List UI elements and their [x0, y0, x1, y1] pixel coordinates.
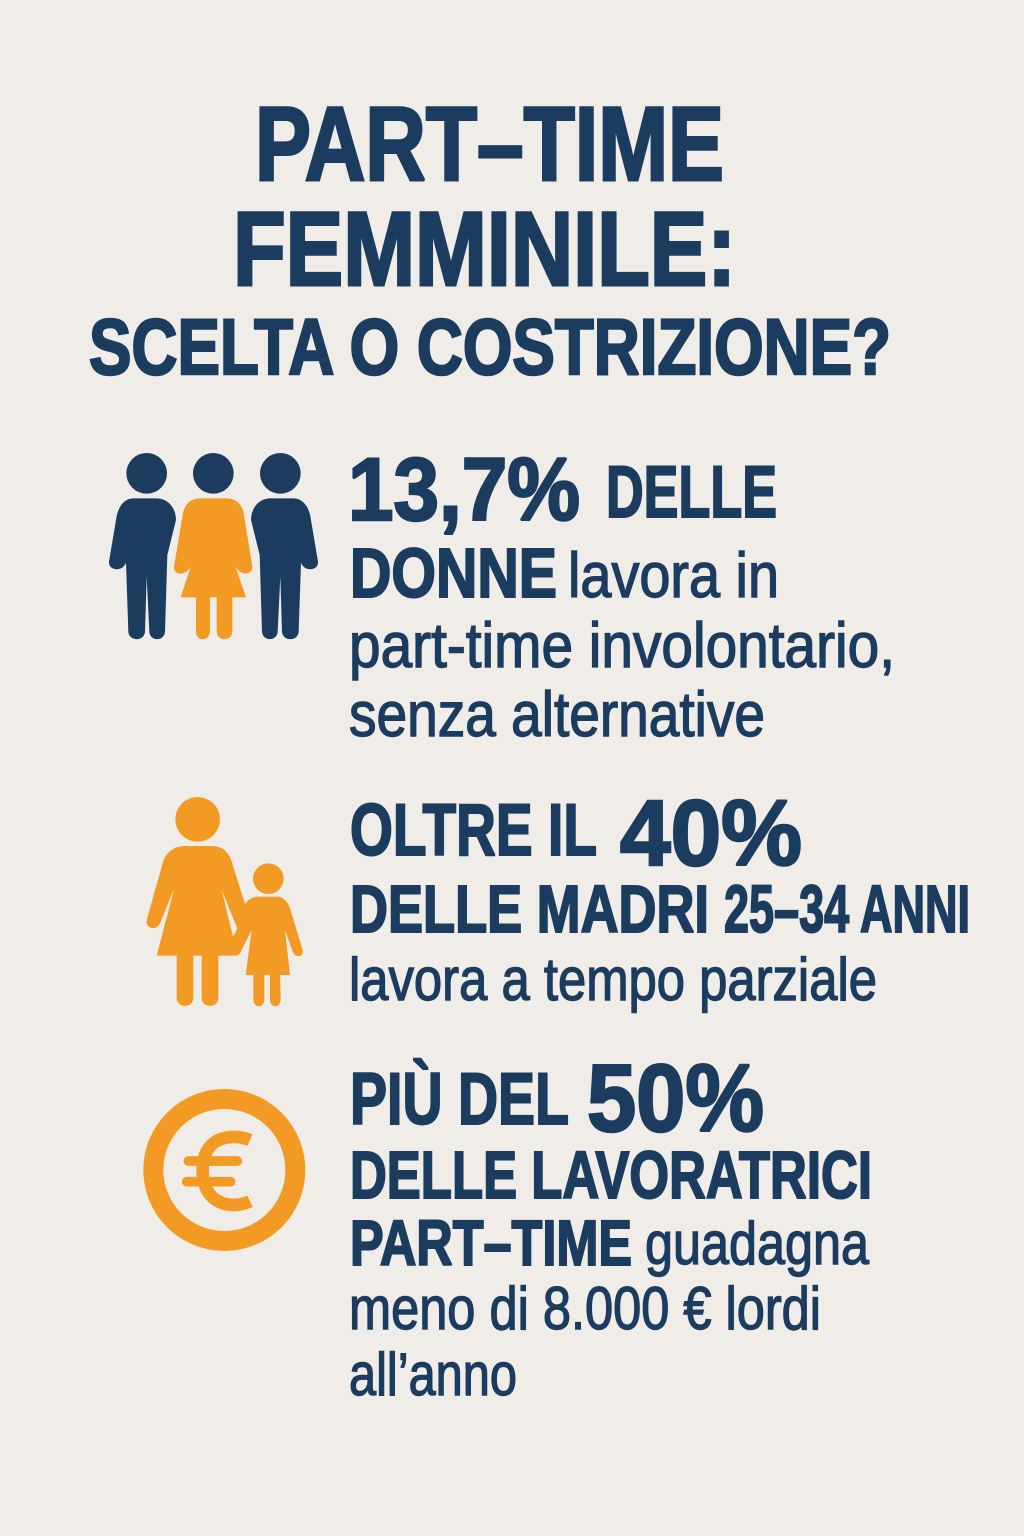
stat: 13,7%: lavora in [568, 541, 779, 611]
title [89, 86, 891, 391]
icon: mother and child [146, 797, 303, 1006]
stat: 50% [349, 1045, 872, 1408]
stat: 40%: 40% [620, 781, 802, 885]
stat: 50%: PIÙ DEL [350, 1059, 569, 1140]
title: FEMMINILE: [233, 191, 736, 308]
stat: 50%: guadagna [645, 1210, 870, 1277]
stat: 13,7%: part-time involontario, [349, 611, 895, 681]
title: PART–TIME [255, 86, 724, 203]
stat: 40% [349, 781, 970, 1013]
stat: 50%: meno di 8.000 € lordi [349, 1275, 821, 1342]
stat: 50%: DELLE LAVORATRICI [350, 1138, 872, 1213]
stat: 13,7% [348, 439, 895, 750]
stat: 50%: all’anno [349, 1341, 517, 1408]
stat: 13,7%: 13,7% [348, 439, 580, 539]
stat: 40%: DELLE MADRI [350, 872, 709, 947]
stat: 13,7%: DONNE [350, 534, 557, 612]
stat: 13,7%: DELLE [606, 452, 777, 533]
stat: 50%: PART–TIME [350, 1207, 632, 1279]
icon: three people, one woman highlighted [109, 453, 318, 639]
icon: euro coin [153, 1099, 295, 1241]
stat: 50%: 50% [587, 1045, 764, 1152]
stat: 13,7%: senza alternative [349, 680, 765, 750]
stat: 40%: OLTRE IL [350, 790, 597, 871]
stat: 40%: lavora a tempo parziale [349, 946, 877, 1013]
